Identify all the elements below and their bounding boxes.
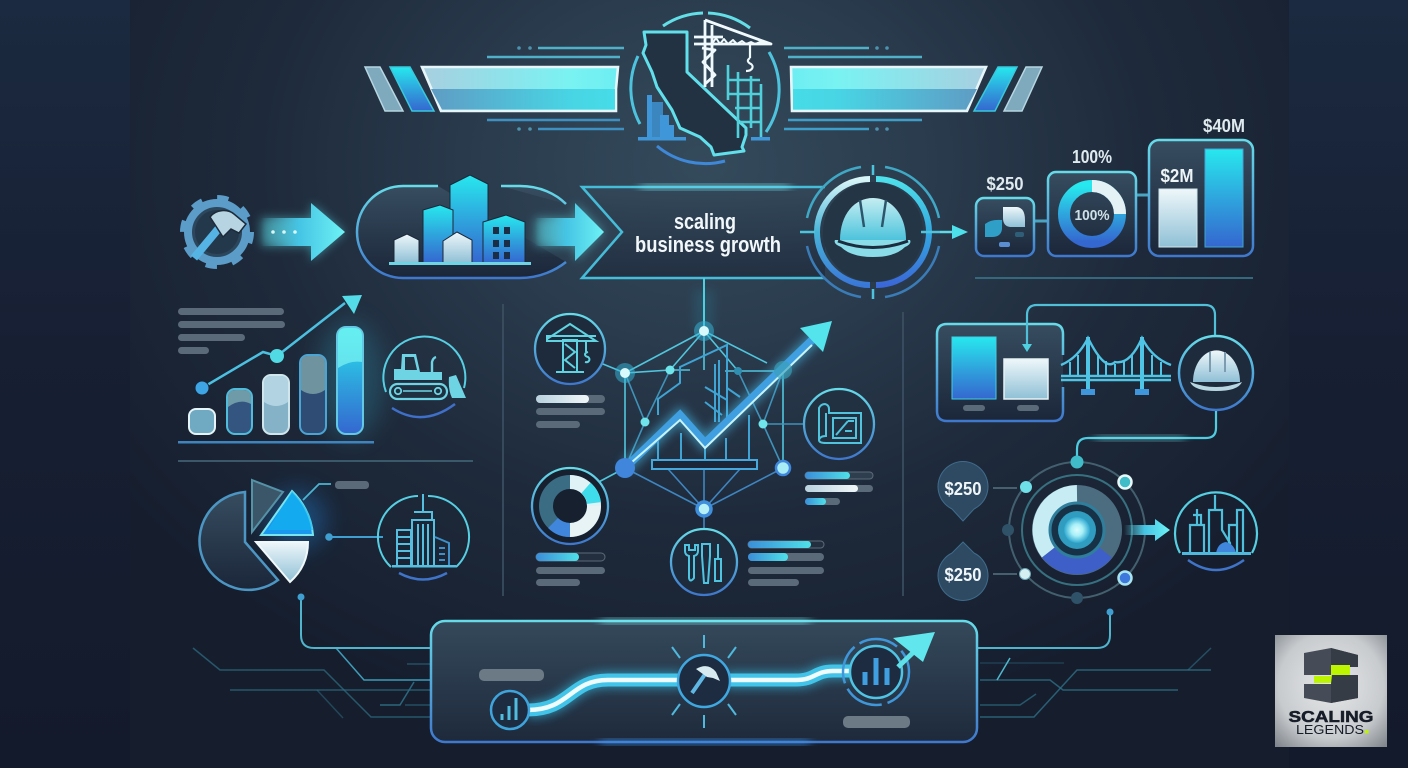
logo: Scaling Legends xyxy=(1275,635,1387,747)
text placeholder bars xyxy=(178,308,285,354)
icon: city circle xyxy=(1175,492,1257,570)
connector into box xyxy=(1022,305,1215,352)
comparison box xyxy=(937,324,1063,421)
network lines xyxy=(593,278,804,530)
pin: $250 top xyxy=(938,462,1017,521)
right traces xyxy=(980,648,1211,717)
blueprint panel bars xyxy=(805,472,873,505)
icon: gear and hammer xyxy=(184,199,250,265)
icon: hard hat dial xyxy=(800,165,940,299)
logo wordmark: SCALING xyxy=(1288,709,1374,726)
pin: $250 bottom: $250 xyxy=(944,565,982,585)
left panel: growth xyxy=(178,295,473,590)
buildings xyxy=(394,175,525,263)
tools panel bars xyxy=(748,541,824,586)
California outline xyxy=(643,32,746,155)
trend arrow xyxy=(195,295,362,395)
pin: $250 top: $250 xyxy=(944,479,982,499)
left ribbon stripes xyxy=(365,67,434,111)
network nodes xyxy=(615,321,792,516)
capsule with city buildings xyxy=(357,175,566,278)
icon: tools circle xyxy=(671,529,824,595)
metric: $2M to $40M bars: $2M xyxy=(1160,166,1194,186)
gauge xyxy=(1002,456,1145,604)
main connectors xyxy=(298,594,1114,648)
logo: Scaling Legends: LEGENDS xyxy=(1296,722,1364,737)
arrow 2 xyxy=(535,203,604,261)
center building xyxy=(652,345,757,469)
emblem rings xyxy=(631,13,779,164)
arrow to metrics xyxy=(940,225,968,239)
gauge nodes xyxy=(1002,456,1132,604)
icon: start bar chart xyxy=(491,691,529,729)
chevron panel: business growth xyxy=(635,232,781,257)
pie chart xyxy=(200,480,383,590)
donut panel bars xyxy=(536,553,605,586)
arrow 1 xyxy=(261,203,345,261)
metrics panel xyxy=(976,116,1253,256)
right title banner xyxy=(791,67,986,111)
icon: hard hat circle xyxy=(1179,336,1253,410)
right panel xyxy=(937,305,1257,604)
emblem: California and construction xyxy=(631,13,779,164)
icon: crane circle xyxy=(535,314,605,428)
left title banner xyxy=(422,67,618,111)
bar chart xyxy=(178,320,384,444)
metric: 100% donut: 100% xyxy=(1072,147,1112,167)
left traces xyxy=(193,648,431,718)
chevron panel xyxy=(582,185,825,278)
glowing path xyxy=(528,671,853,710)
timeline label pills xyxy=(479,669,910,728)
icon: end chart and arrow xyxy=(843,632,935,705)
icon: bridge xyxy=(1061,337,1171,392)
metric: 100% donut: 100% xyxy=(1074,207,1110,224)
header banner xyxy=(365,46,1042,131)
crane xyxy=(694,20,771,87)
icon: donut circle xyxy=(532,468,608,586)
process flow row xyxy=(184,165,968,299)
metric: $250 xyxy=(976,174,1034,256)
metric: $2M to $40M bars xyxy=(1149,116,1253,256)
metric: 100% donut xyxy=(1048,147,1136,256)
gauge arrow xyxy=(1124,519,1170,541)
timeline panel xyxy=(431,619,977,744)
icon: bulldozer xyxy=(383,337,466,417)
crane panel bars xyxy=(536,395,605,428)
rising arrow xyxy=(615,321,832,478)
icon: blueprint circle xyxy=(804,389,874,505)
circuit traces xyxy=(193,594,1211,718)
banner accent lines xyxy=(487,46,922,131)
skyline left xyxy=(638,95,686,140)
metric: $250: $250 xyxy=(986,174,1024,194)
icon: hammer burst xyxy=(672,635,736,728)
scaffold grid xyxy=(728,65,761,138)
right ribbon stripes xyxy=(974,67,1042,111)
center panel: network xyxy=(532,278,874,595)
panel dividers xyxy=(503,304,903,596)
connector to gauge xyxy=(1077,411,1216,462)
emblem base xyxy=(751,137,770,140)
lime dot xyxy=(1365,730,1368,734)
icon: skyscraper xyxy=(378,494,469,580)
logo mark xyxy=(1304,648,1358,703)
metric: $2M to $40M bars: $40M xyxy=(1203,116,1245,136)
pin: $250 bottom xyxy=(938,542,1017,600)
title text: scaling xyxy=(674,209,736,234)
